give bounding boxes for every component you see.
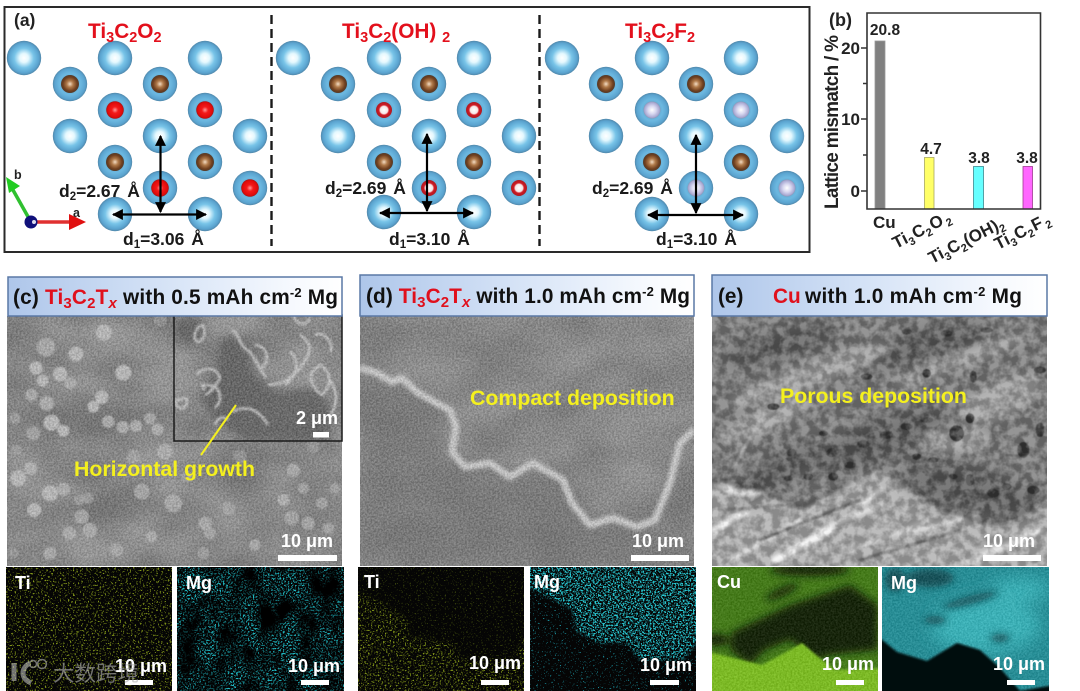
x label: Ti3C2F2: 3 [1009,236,1020,250]
bar: Ti3C2(OH)2 [974,166,984,209]
label d1: Ti3C2O2: 1 [134,239,141,251]
bar values: 3.8 [968,150,990,167]
dark substrate streaks [720,500,960,560]
label (b): (b) [829,10,852,30]
header: d: (d) Ti [366,285,417,308]
watermark [14,657,139,688]
watermark logo [14,660,46,683]
arrow d2: Ti3C2(OH)2 [426,134,428,211]
x label: Ti3C2F2: Ti [991,230,1013,254]
EDS map: c Mg: Mg [186,573,212,593]
EDS map: d Mg: Mg [534,572,560,592]
header: c [8,277,342,316]
x label: Ti3C2O2: 2 [944,216,955,230]
y axis tick labels [841,39,860,201]
title: Ti3C2(OH)2: 2 [383,30,391,46]
title: Ti3C2(OH)2: C [368,20,383,43]
SEM base: d [360,316,694,566]
title: Ti3C2O2: C [114,20,129,43]
scale bar: e [983,531,1041,561]
dark zones [718,314,1043,529]
y axis title: Lattice mismatch / % [822,35,843,209]
x label: Ti3C2(OH)2: 2 [998,222,1009,236]
header: e: with 1.0 mAh cm [805,285,973,308]
callout: horizontal growth: Horizontal growth [74,457,255,481]
bright Cu substrate [712,470,1047,566]
x label: Ti3C2O2: 2 [924,226,935,240]
header: c: T [96,286,109,309]
label d2: Ti3C2F2: =2.69 Å [609,178,673,198]
inset scale: 2 um [296,408,338,438]
EDS map: e Cu [712,567,878,691]
header: d: T [449,285,462,308]
crystal axes triad [6,168,86,230]
title: Ti3C2(OH)2: 2 [442,30,450,46]
crystal axes triad: b [14,168,22,182]
EDS map: e Mg [882,567,1049,691]
label d1: Ti3C2O2: d [123,229,134,249]
EDS map: c Ti [6,567,172,691]
header: d: Mg [654,285,690,308]
EDS map: e Cu: Cu [717,572,741,592]
arrow d2: Ti3C2O2 [159,136,162,212]
label d2: Ti3C2(OH)2: d [325,178,336,198]
label d2: Ti3C2F2: d [592,178,603,198]
y axis tick labels: 10 [841,110,860,129]
header: c: C [72,286,87,309]
bar: Cu [875,41,885,209]
scale bar: c [278,531,337,561]
scale bar: d: 10 μm [632,531,684,551]
panel e: Cu 1.0 mAh SEM image [700,275,1060,580]
substrate streaks [714,486,1040,566]
arrow d1: Ti3C2F2 [648,214,743,216]
header: d: 3 [417,294,425,311]
dark flat regions: inset [175,318,330,441]
title: Ti3C2(OH)2: Ti [342,20,360,43]
x label: Ti3C2F2: C [1011,221,1030,244]
inset scale: 2 um: 2 μm [296,408,338,428]
header: d: C [426,285,441,308]
title: Ti3C2F2: 2 [687,30,695,46]
bright platelet edges: inset [176,315,336,425]
x label: Ti3C2F2: F [1028,213,1046,235]
label d1: Ti3C2F2: 1 [667,239,674,251]
header: e: Cu [773,285,801,308]
header: c: 2 [87,295,95,312]
bar values: 20.8 [870,22,900,39]
title: Ti3C2F2: C [651,20,666,43]
x label: Ti3C2(OH)2: Ti [925,244,947,268]
atom lattice: Ti3C2(OH)2 [276,41,536,229]
bar values: 4.7 [920,141,942,158]
EDS map: e Mg: 10 μm [993,654,1045,674]
y axis tick labels: 20 [841,39,860,58]
header: d: with 1.0 mAh cm [470,285,642,308]
Mg deposit particles: c [8,313,340,560]
y axis tick labels: 0 [851,182,860,201]
header: e [712,275,1047,316]
arrow d1: Ti3C2(OH)2 [380,212,473,214]
header: c: 3 [63,295,72,312]
title: Ti3C2F2: F [674,20,687,43]
EDS map: c Ti: 10 μm [115,656,167,676]
SEM base: c [7,313,342,566]
title: Ti3C2(OH)2: (OH) [391,20,442,43]
callout: compact deposition: Compact deposition [470,386,675,410]
EDS map: d Mg [530,567,696,691]
panel a frame [4,7,810,252]
scale bar: e: 10 μm [983,531,1035,551]
label d1: Ti3C2(OH)2: d [389,229,400,249]
scratch ridge [735,390,800,465]
x label: Ti3C2(OH)2: C [944,236,963,258]
header: e: Mg [986,285,1022,308]
title: Ti3C2O2: 3 [106,30,114,46]
header: c: (c) Ti [13,286,63,309]
label d1: Ti3C2F2: d [656,229,667,249]
bright deposit edge [360,368,694,527]
label d2: Ti3C2(OH)2: 2 [336,188,342,200]
EDS map: d Ti: 10 μm [469,653,521,673]
x label: Ti3C2(OH)2: (OH) [960,216,1002,250]
callout: porous deposition: Porous deposition [780,384,967,408]
title: Ti3C2O2: Ti [88,20,106,43]
header: d: x [461,294,471,311]
title: Ti3C2O2: 2 [153,30,162,46]
x label: Ti3C2O2: C [909,220,928,243]
x label: Ti3C2(OH)2: 2 [959,242,970,255]
crystal axes triad: a [73,206,81,220]
scale bar: c: 10 μm [281,531,333,551]
header: c: -2 [290,285,302,300]
header: d: -2 [642,284,654,299]
EDS map: c Mg: 10 μm [288,656,340,676]
header: d [360,275,694,316]
label d1: Ti3C2O2: =3.06 Å [140,229,204,249]
title: Ti3C2F2: Ti [625,20,643,43]
atom lattice: Ti3C2O2 [7,41,267,231]
label d2: Ti3C2F2: 2 [603,188,609,200]
chart axes [861,13,1040,209]
watermark text: 大数跨境 [53,657,139,688]
scale bar: d [631,531,689,561]
lighter bands [715,329,1048,452]
deposit shadow edge [712,478,1047,522]
label d2: Ti3C2(OH)2: =2.69 Å [342,178,406,198]
arrow d2: Ti3C2F2 [695,135,697,213]
EDS map: c Ti: Ti [15,573,31,593]
title: Ti3C2O2: O [137,20,153,43]
header: c: with 0.5 mAh cm [117,286,290,309]
header: e: (e) [718,285,743,308]
EDS map: c Mg [177,567,344,691]
title: Ti3C2F2: 2 [666,30,674,46]
label d2: Ti3C2O2: 2 [70,191,76,203]
bar values: 3.8 [1016,150,1038,167]
panel c: Ti3C2Tx 0.5 mAh SEM image [7,277,342,566]
bar: Ti3C2F2 [1023,166,1032,209]
panel d: Ti3C2Tx 1.0 mAh SEM image [360,275,694,566]
x label: Cu: Cu [873,213,896,232]
title: Ti3C2O2: 2 [129,30,137,46]
bar: Ti3C2O2 [924,158,934,209]
dark halo under deposit edge [360,372,694,566]
pointer line: horizontal growth [201,405,236,455]
x label: Ti3C2F2: 2 [1026,227,1037,241]
divider dashed lines [272,15,540,246]
bar values [870,22,1038,167]
EDS map: d Ti: Ti [364,572,380,592]
panel b: lattice mismatch bar chart [822,10,1055,270]
inset border: c [174,315,342,441]
title: Ti3C2(OH)2: 3 [360,30,368,46]
x label: Ti3C2(OH)2: 3 [943,250,954,264]
header: d: 2 [441,294,449,311]
label d2: Ti3C2O2: d [59,181,70,201]
inset SEM: c [174,315,342,441]
EDS map: d Ti [358,567,524,691]
title: Ti3C2F2: 3 [643,30,651,46]
EDS map: e Mg: Mg [891,573,917,593]
arrow d1: Ti3C2O2 [113,213,206,216]
label d1: Ti3C2(OH)2: =3.10 Å [406,229,470,249]
header: e: -2 [973,284,985,299]
SEM base: e [712,316,1047,566]
atom lattice: Ti3C2F2 [545,41,804,231]
label d1: Ti3C2(OH)2: 1 [400,239,407,251]
label (a): (a) [14,10,35,30]
header: c: Mg [302,286,338,309]
x label: Ti3C2F2: 2 [1044,218,1055,232]
label d1: Ti3C2F2: =3.10 Å [673,229,737,249]
header: c: x [108,295,118,312]
EDS map: e Cu: 10 μm [822,654,874,674]
panel a: atomic structures [4,7,810,252]
EDS map: d Mg: 10 μm [640,655,692,675]
x label: Ti3C2O2: Ti [889,229,911,253]
label d2: Ti3C2O2: =2.67 Å [76,181,140,201]
x label: Ti3C2O2: O [926,211,946,234]
porous dark pits [767,327,1046,498]
x label: Ti3C2O2: 3 [907,235,918,249]
